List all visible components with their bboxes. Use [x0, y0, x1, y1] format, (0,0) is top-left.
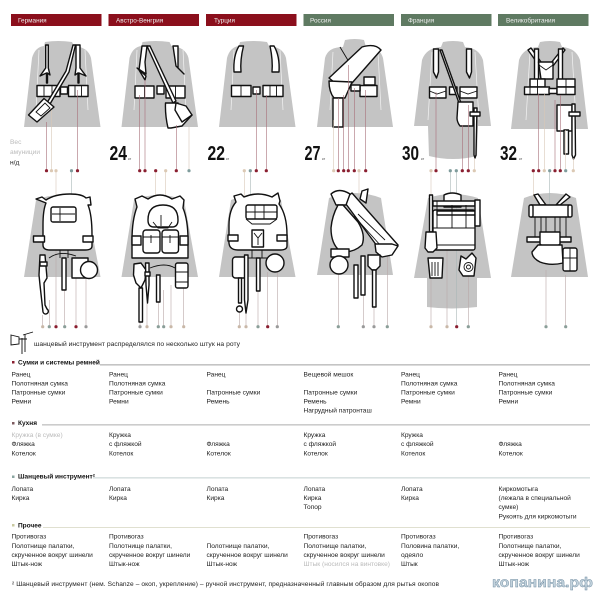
- Turkey front equipment: [232, 46, 283, 96]
- country headers: Великобритания: [506, 16, 556, 24]
- section: entrenching tools: [12, 472, 590, 520]
- section: bags: Полотняная сумка: [498, 380, 555, 387]
- section: other: Штык-нож: [109, 561, 140, 568]
- section: bags: Патронные сумки: [206, 389, 261, 396]
- section: bags: Ранец: [109, 371, 128, 378]
- weights: 24: [110, 143, 128, 165]
- tools note: [11, 332, 241, 354]
- weights: 32: [500, 143, 517, 165]
- section: entrenching tools: (лежала в специальной: [498, 494, 571, 502]
- section: other: Половина палатки,: [401, 543, 459, 550]
- section: other: Полотнище палатки,: [206, 543, 270, 550]
- section: bags: Ремень: [206, 398, 230, 405]
- section: other: скрученное вокруг шинели: [304, 552, 385, 559]
- Austria-Hungary backpack and tools: [132, 195, 188, 322]
- section: other: Прочее: [18, 522, 42, 530]
- section: other: Полотнище палатки,: [304, 543, 367, 550]
- weights: кг: [226, 156, 230, 161]
- section: bags: Ремни: [401, 398, 421, 405]
- section: other: [12, 522, 590, 568]
- Germany backpack and tools: [34, 194, 98, 314]
- weight label: [10, 139, 40, 166]
- section: bags: Патронные сумки: [401, 389, 455, 396]
- section: kitchen: Фляжка: [12, 441, 35, 448]
- Britain backpack and tools: [527, 194, 577, 271]
- section: entrenching tools: Шанцевый инструмент²: [18, 472, 96, 480]
- section: other: Штык-нож: [12, 561, 43, 568]
- section: kitchen: [12, 420, 590, 458]
- section: kitchen: Котелок: [498, 450, 523, 458]
- section: kitchen: с фляжкой: [304, 440, 336, 448]
- country headers: Германия: [18, 17, 47, 24]
- section: other: Противогаз: [498, 534, 533, 540]
- section: kitchen: Фляжка: [206, 441, 230, 448]
- section: bags: Сумки и системы ремней: [18, 358, 100, 366]
- section: other: Штык (носился на винтовке): [304, 561, 390, 568]
- section: bags: Патронные сумки: [109, 389, 163, 396]
- footnote: ² Шанцевый инструмент (нем. Schanze – окоп, укрепление) – ручной инструмент, предназначенный главным образом для рытья окопов: [12, 580, 439, 588]
- section: other: одеяло: [401, 552, 424, 559]
- section: kitchen: Кухня: [18, 420, 37, 427]
- section: kitchen: Кружка: [401, 432, 423, 439]
- section: kitchen: Котелок: [109, 450, 133, 458]
- section: entrenching tools: Лопата: [401, 486, 423, 493]
- section: other: скрученное вокруг шинели: [498, 552, 580, 559]
- section: other: скрученное вокруг шинели: [206, 552, 288, 559]
- section: bags: Ранец: [401, 371, 420, 378]
- section: entrenching tools: Киркомотыга: [498, 486, 538, 493]
- section: entrenching tools: Топор: [304, 504, 322, 511]
- France front equipment: [430, 49, 480, 158]
- connector lines: [43, 65, 573, 327]
- section: kitchen: Котелок: [206, 450, 231, 458]
- section: other: скрученное вокруг шинели: [109, 552, 191, 559]
- section: entrenching tools: Рукоять для киркомотыги: [498, 514, 577, 520]
- section: other: Штык-нож: [498, 561, 530, 568]
- Russia front equipment: [329, 46, 381, 127]
- section: entrenching tools: Лопата: [304, 486, 326, 493]
- section: bags: Ранец: [12, 371, 31, 378]
- section: kitchen: с фляжкой: [401, 440, 434, 448]
- section: other: Полотнище палатки,: [12, 543, 75, 550]
- section: other: Противогаз: [12, 534, 46, 540]
- back coats: [24, 193, 588, 308]
- Germany front equipment: [28, 45, 88, 122]
- section: bags: Патронные сумки: [498, 389, 553, 396]
- watermark: копанина.рф: [492, 574, 593, 590]
- section: kitchen: Котелок: [401, 450, 425, 458]
- back color dots: [41, 325, 567, 328]
- section: other: Противогаз: [109, 534, 144, 540]
- section: entrenching tools: Кирка: [109, 495, 127, 502]
- section: kitchen: с фляжкой: [109, 440, 142, 448]
- front coats: [24, 39, 588, 159]
- section: entrenching tools: Лопата: [109, 486, 131, 493]
- section: bags: Ремни: [109, 398, 129, 405]
- section: entrenching tools: Лопата: [206, 486, 229, 493]
- section: bags: Ранец: [206, 371, 226, 378]
- section: entrenching tools: сумке): [498, 504, 518, 511]
- section: kitchen: Кружка: [304, 432, 326, 439]
- section: entrenching tools: Кирка: [206, 495, 225, 502]
- section: other: Штык-нож: [206, 561, 238, 568]
- weights: кг: [421, 156, 425, 161]
- tools note: шанцевый инструмент распределялся по несколько штук на роту: [34, 340, 241, 348]
- section: bags: Полотняная сумка: [109, 380, 166, 387]
- weights: [110, 143, 523, 165]
- country headers: Россия: [310, 17, 331, 24]
- section: kitchen: Фляжка: [498, 441, 522, 448]
- France backpack and tools: [425, 193, 480, 278]
- section: other: Противогаз: [401, 534, 436, 540]
- weights: кг: [519, 156, 523, 161]
- section: other: Противогаз: [304, 534, 338, 540]
- section: entrenching tools: Кирка: [304, 495, 322, 502]
- country headers: Франция: [408, 17, 435, 24]
- Turkey backpack and tools: [228, 193, 287, 313]
- weight label: Вес: [10, 139, 22, 146]
- color dots front: [45, 169, 575, 172]
- section: bags: Патронные сумки: [12, 389, 66, 396]
- section: bags: Полотняная сумка: [12, 380, 68, 387]
- icon: shovel and pick: [11, 332, 33, 354]
- weights: кг: [128, 156, 132, 161]
- section: kitchen: Кружка: [109, 432, 131, 439]
- section: bags: Полотняная сумка: [401, 380, 458, 387]
- section: bags: Ремни: [12, 398, 31, 405]
- section: bags: Нагрудный патронташ: [304, 406, 372, 414]
- weight label: амуниции: [10, 149, 40, 156]
- section: other: скрученное вокруг шинели: [12, 552, 93, 559]
- weight label: н/д: [10, 160, 19, 166]
- section: entrenching tools: Кирка: [12, 495, 30, 502]
- country headers: Турция: [214, 17, 235, 24]
- section: other: Штык: [401, 561, 418, 568]
- section: entrenching tools: Лопата: [12, 486, 34, 493]
- section: bags: [12, 358, 590, 414]
- section: other: Полотнище палатки,: [498, 543, 562, 550]
- section: kitchen: Котелок: [12, 450, 36, 458]
- Russia sack and tools: [330, 189, 398, 307]
- section: bags: Ремни: [498, 398, 518, 405]
- weights: 27: [304, 143, 320, 165]
- section: entrenching tools: Кирка: [401, 495, 419, 502]
- section: bags: Патронные сумки: [304, 389, 358, 396]
- weights: кг: [322, 156, 326, 161]
- country headers: [11, 14, 588, 26]
- section: bags: Ранец: [498, 371, 518, 378]
- section: bags: Вещевой мешок: [304, 370, 353, 378]
- weights: 22: [208, 143, 225, 165]
- section: kitchen: Кружка (в сумке): [12, 432, 63, 439]
- section: bags: Ремень: [304, 398, 327, 405]
- section: kitchen: Котелок: [304, 450, 328, 458]
- country headers: Австро-Венгрия: [116, 17, 164, 24]
- Austria-Hungary front equipment: [135, 46, 192, 128]
- section: other: Полотнище палатки,: [109, 543, 172, 550]
- weights: 30: [402, 143, 419, 165]
- Britain front equipment: [524, 48, 580, 159]
